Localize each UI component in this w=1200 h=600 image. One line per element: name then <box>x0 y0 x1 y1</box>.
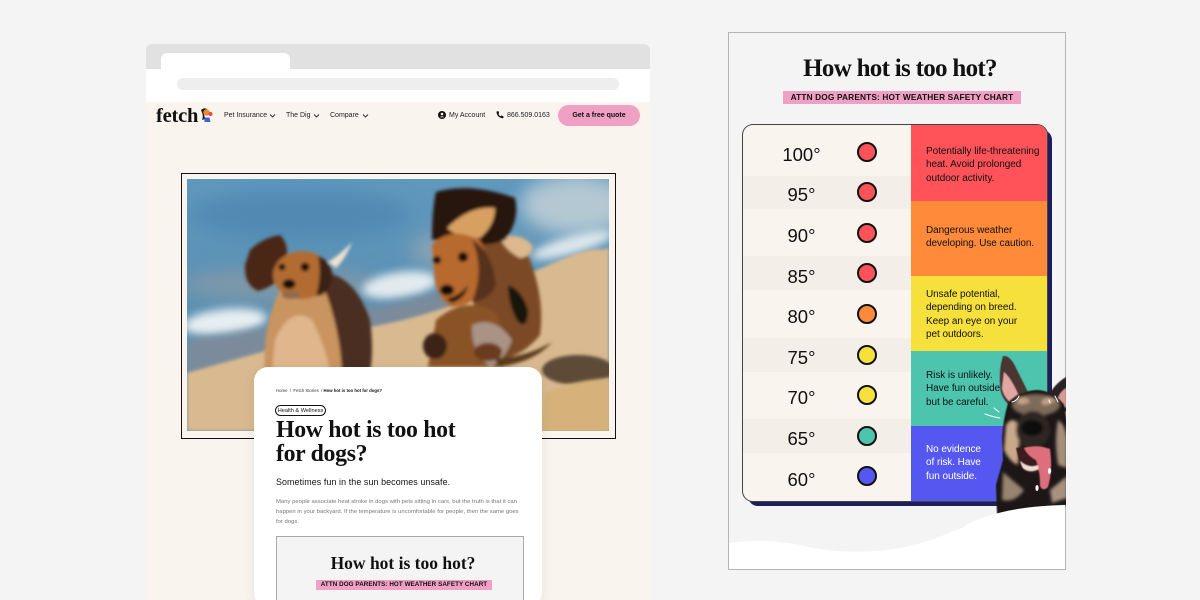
band: orange risk <box>911 201 1047 276</box>
motion lines <box>985 408 1000 418</box>
band: red risk: Potentially life-threatening <box>926 146 1039 157</box>
nav chevron <box>270 114 276 118</box>
browser tab bar <box>146 44 650 69</box>
band: teal risk: Risk is unlikely. <box>926 370 993 381</box>
band: orange risk: Dangerous weather <box>926 225 1012 236</box>
article paragraph: happen in your backyard. If the temperature is uncomfortable for people, then the same goes <box>276 509 519 515</box>
article card <box>254 367 542 600</box>
dot 90 red <box>857 223 877 243</box>
temperature table <box>743 125 1047 501</box>
chart pink subtitle tag: ATTN DOG PARENTS: HOT WEATHER SAFETY CHART <box>791 92 1013 102</box>
band: blue risk: fun outside. <box>926 471 977 482</box>
temperature 75: 75° <box>788 347 815 368</box>
band: red risk: outdoor activity. <box>926 173 994 184</box>
nav chevron <box>362 114 368 118</box>
dot 60 blue <box>857 466 877 486</box>
row stripe 75 <box>743 338 911 372</box>
dot 65 teal <box>857 426 877 446</box>
dot 70 yellow <box>857 385 877 405</box>
band: teal risk: but be careful. <box>926 397 988 408</box>
preview pink subtitle tag <box>316 580 492 590</box>
band: teal risk: Have fun outside, <box>926 383 1003 394</box>
band: blue risk: No evidence <box>926 444 981 455</box>
category tag <box>275 405 326 416</box>
left dog <box>245 235 372 372</box>
article heading: How hot is too hot <box>276 417 455 443</box>
temperature 100: 100° <box>782 144 821 165</box>
temperature 80: 80° <box>788 306 815 327</box>
icon: phone <box>496 111 504 118</box>
article paragraph: Many people associate heat stroke in dogs with pets sitting in cars, but the truth is that it can <box>276 499 517 505</box>
temperature 60: 60° <box>788 469 815 490</box>
temperature 70: 70° <box>788 387 815 408</box>
nav phone number: 866.509.0163 <box>507 112 550 119</box>
embedded chart preview <box>276 536 524 600</box>
article subheading: Sometimes fun in the sun becomes unsafe. <box>276 477 450 487</box>
nav link: my account: My Account <box>449 112 485 119</box>
band: teal risk <box>911 351 1047 426</box>
chart title: How hot is too hot? <box>803 55 997 82</box>
dot 100 red <box>857 142 877 162</box>
category tag: Health & Wellness <box>278 408 323 414</box>
dot 95 red <box>857 182 877 202</box>
browser address area <box>146 69 650 102</box>
browser mockup <box>146 44 650 600</box>
wave over dog <box>966 505 1065 526</box>
white wave footer <box>729 527 1065 569</box>
row stripe 65 <box>743 419 911 453</box>
band: red risk <box>911 125 1047 201</box>
band: yellow risk: depending on breed. <box>926 302 1017 313</box>
band: yellow risk <box>911 276 1047 351</box>
temperature 85: 85° <box>788 266 815 287</box>
nav link: the dig: The Dig <box>286 112 311 119</box>
band: yellow risk: Unsafe potential, <box>926 289 1000 300</box>
site logo: fetch: fetch <box>156 105 198 127</box>
band: blue risk <box>911 426 1047 501</box>
band: yellow risk: Keep an eye on your <box>926 316 1017 327</box>
panel: hot weather safety chart <box>728 32 1066 570</box>
article paragraph <box>276 499 519 525</box>
preview pink subtitle tag: ATTN DOG PARENTS: HOT WEATHER SAFETY CHART <box>321 581 487 588</box>
row stripe 95 <box>743 176 911 209</box>
logo icon: bird <box>201 108 213 122</box>
nav link: pet insurance: Pet Insurance <box>224 112 267 119</box>
article heading <box>276 417 456 467</box>
temperature 65: 65° <box>788 428 815 449</box>
band: orange risk: developing. Use caution. <box>926 238 1034 249</box>
breadcrumb: Home / Fetch Stories / How hot is too hot for dogs? <box>276 388 382 393</box>
hero photo: two dogs running on a beach <box>187 179 609 431</box>
call to action button <box>558 105 640 126</box>
browser active tab <box>161 53 290 69</box>
temperature 95: 95° <box>788 184 815 205</box>
nav chevron <box>314 114 320 118</box>
right dog <box>423 188 552 367</box>
preview title: How hot is too hot? <box>331 553 475 573</box>
hero image frame <box>181 173 616 439</box>
nav link: compare: Compare <box>330 112 359 119</box>
dot 80 orange <box>857 304 877 324</box>
article heading: for dogs? <box>276 441 367 467</box>
chart drop shadow <box>748 130 1052 506</box>
icon: account <box>438 111 446 119</box>
band: red risk: heat. Avoid prolonged <box>926 159 1021 170</box>
call to action button: Get a free quote <box>572 112 626 119</box>
article paragraph: for dogs. <box>276 519 299 525</box>
row stripe 85 <box>743 256 911 290</box>
dot 75 yellow <box>857 345 877 365</box>
illustration: panting german shepherd <box>984 355 1066 514</box>
dot 85 red <box>857 263 877 283</box>
temperature 90: 90° <box>788 225 815 246</box>
address bar <box>177 78 619 90</box>
band: blue risk: of risk. Have <box>926 457 981 468</box>
band: yellow risk: pet outdoors. <box>926 329 984 340</box>
